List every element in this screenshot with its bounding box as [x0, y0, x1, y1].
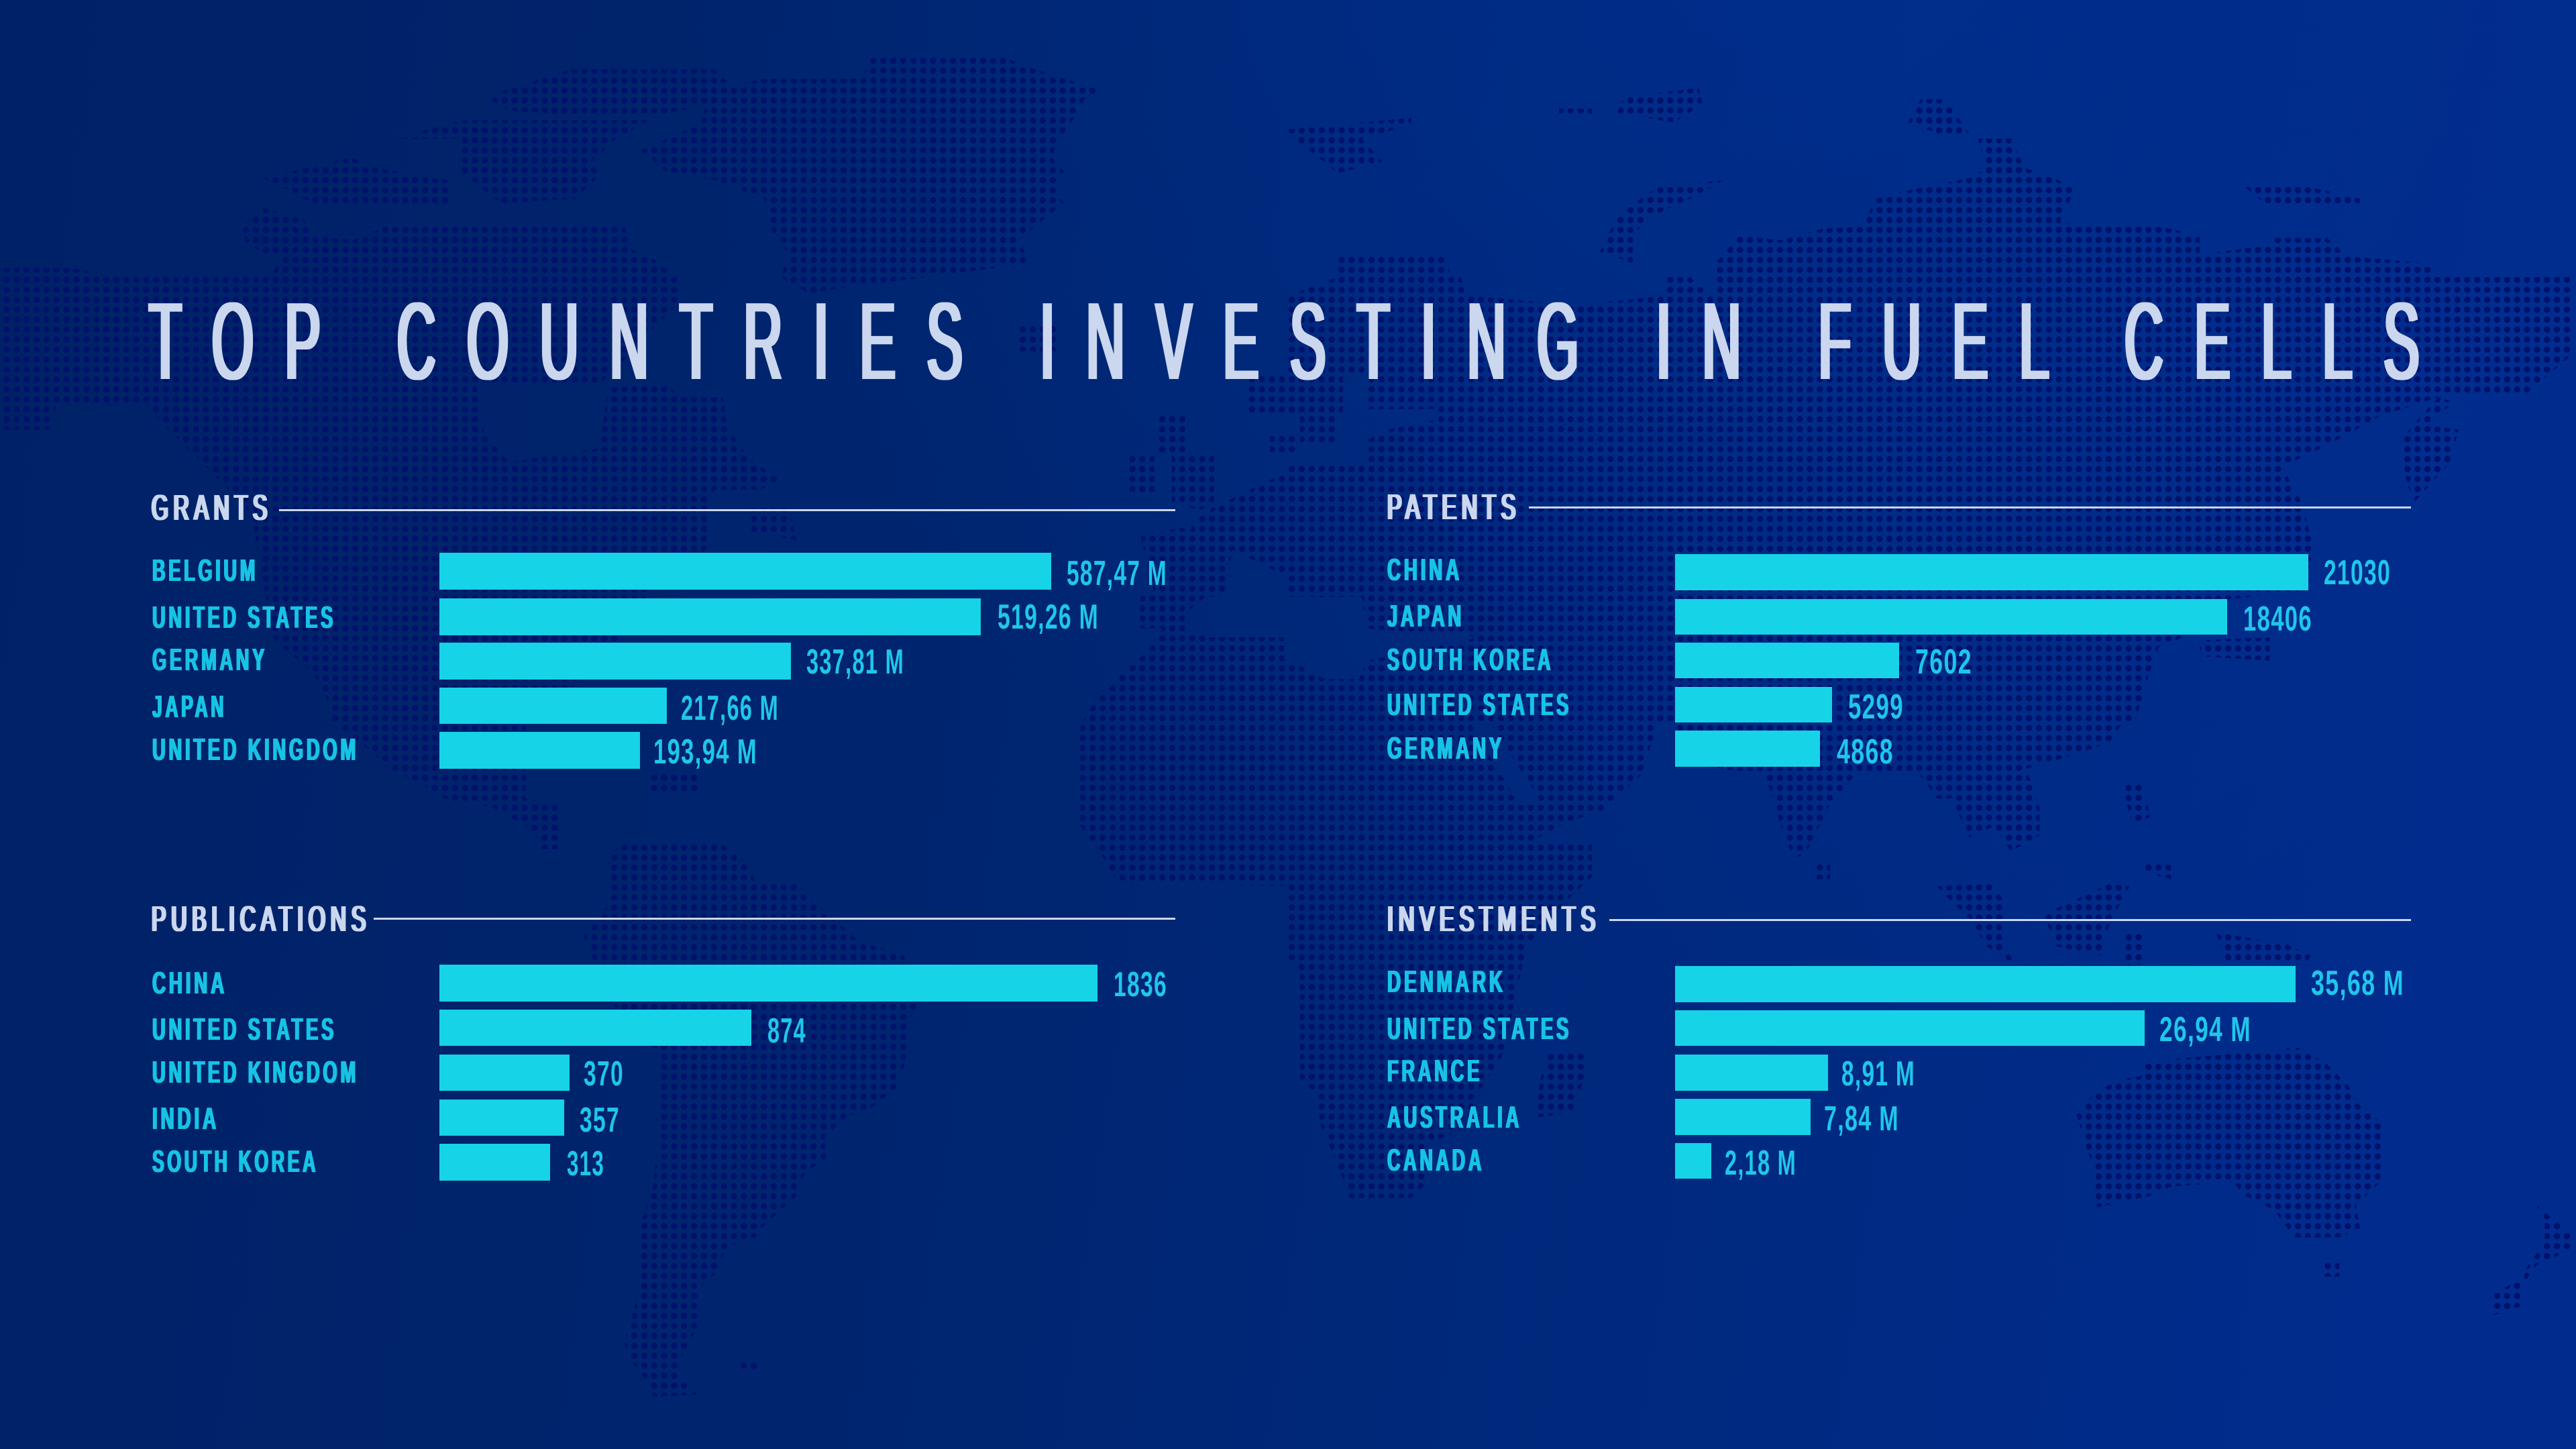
row: Germany: GERMANY — [152, 642, 268, 677]
row: Germany — [152, 642, 904, 682]
row: United States — [1387, 687, 1904, 727]
panel: publications — [152, 899, 1175, 1183]
row: China: CHINA — [152, 965, 227, 1000]
row: France: 8,91 M — [1841, 1055, 1915, 1093]
row: India: INDIA — [152, 1101, 219, 1136]
row: United States: UNITED STATES — [1387, 687, 1572, 722]
row: Japan — [152, 688, 779, 728]
row: United States: 5299 — [1848, 688, 1904, 727]
row: Belgium: BELGIUM — [152, 553, 258, 588]
row: United States: UNITED STATES — [152, 1012, 337, 1046]
row: Germany: 337,81 M — [806, 643, 904, 682]
row: China: CHINA — [1387, 552, 1462, 587]
row: United States — [1387, 1010, 2251, 1049]
row: China — [152, 965, 1167, 1004]
row: Germany: GERMANY — [1387, 731, 1505, 765]
heading: patents: PATENTS — [1387, 487, 1521, 527]
row: United Kingdom — [152, 1055, 624, 1093]
row: United Kingdom — [152, 732, 757, 771]
row: India: 357 — [580, 1101, 620, 1140]
row: United Kingdom: 370 — [584, 1055, 624, 1093]
row: China: 1836 — [1114, 965, 1167, 1004]
row: United Kingdom: 193,94 M — [653, 733, 757, 771]
row: United States — [152, 1010, 806, 1051]
row: China — [1387, 552, 2391, 592]
row: South Korea: 7602 — [1915, 643, 1972, 682]
row: South Korea: SOUTH KOREA — [1387, 642, 1554, 677]
row: France: FRANCE — [1387, 1053, 1483, 1088]
row: Canada: 2,18 M — [1725, 1144, 1796, 1183]
row: Denmark — [1387, 964, 2404, 1003]
row: United Kingdom: UNITED KINGDOM — [152, 732, 359, 767]
row: South Korea — [152, 1144, 604, 1183]
panel: grants — [152, 488, 1175, 771]
row: United States: 26,94 M — [2159, 1010, 2251, 1049]
panel: investments — [1387, 899, 2411, 1183]
row: Denmark: DENMARK — [1387, 964, 1506, 999]
heading: publications: PUBLICATIONS — [152, 899, 371, 939]
row: France — [1387, 1053, 1915, 1093]
row: Denmark: 35,68 M — [2311, 964, 2404, 1003]
row: United Kingdom: UNITED KINGDOM — [152, 1055, 359, 1089]
heading: investments: INVESTMENTS — [1387, 899, 1601, 939]
row: Belgium — [152, 553, 1167, 593]
row: Australia: 7,84 M — [1824, 1099, 1899, 1138]
row: Japan — [1387, 598, 2312, 639]
row: Belgium: 587,47 M — [1067, 554, 1167, 593]
row: Germany: 4868 — [1837, 733, 1894, 771]
row: South Korea: SOUTH KOREA — [152, 1144, 319, 1179]
row: United States: UNITED STATES — [152, 600, 336, 635]
row: South Korea — [1387, 642, 1972, 682]
row: Australia — [1387, 1099, 1899, 1138]
row: United States: 519,26 M — [998, 598, 1099, 637]
heading: grants: GRANTS — [152, 488, 272, 528]
row: Canada: CANADA — [1387, 1142, 1485, 1177]
row: Canada — [1387, 1142, 1796, 1183]
row: United States — [152, 598, 1099, 637]
row: Japan: 18406 — [2243, 600, 2312, 639]
row: Japan: JAPAN — [1387, 598, 1464, 633]
row: Australia: AUSTRALIA — [1387, 1099, 1522, 1134]
row: Germany — [1387, 731, 1894, 771]
row: Japan: 217,66 M — [681, 689, 779, 728]
row: United States: 874 — [767, 1012, 806, 1051]
row: China: 21030 — [2324, 553, 2391, 592]
row: India — [152, 1099, 620, 1140]
row: South Korea: 313 — [567, 1144, 604, 1183]
panel: patents — [1387, 487, 2411, 771]
row: Japan: JAPAN — [152, 689, 227, 724]
row: United States: UNITED STATES — [1387, 1011, 1572, 1046]
